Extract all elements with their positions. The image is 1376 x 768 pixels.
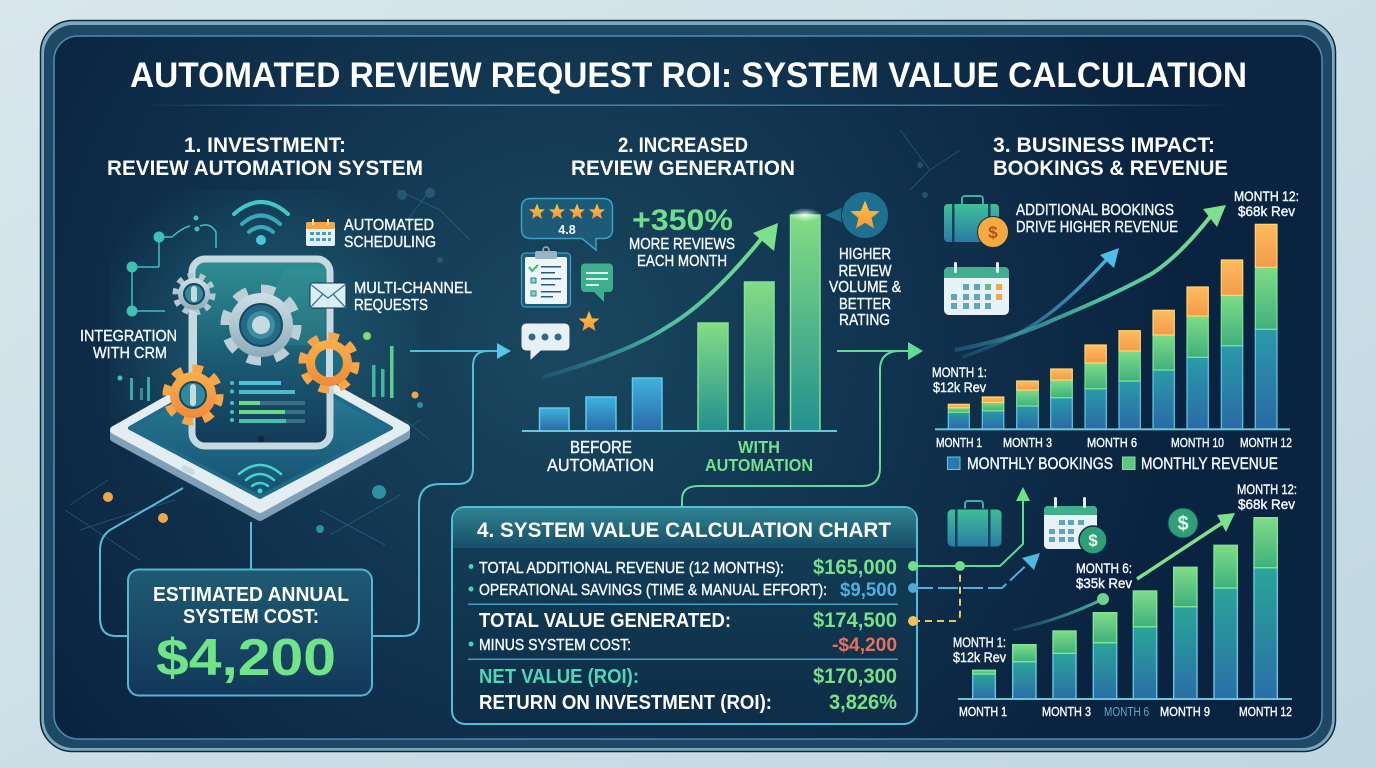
callout: estimated annual system cost xyxy=(128,570,372,696)
row: operational savings: OPERATIONAL SAVINGS (TIME & MANUAL EFFORT): xyxy=(479,582,827,599)
heading: step 1: REVIEW AUTOMATION SYSTEM xyxy=(107,157,423,180)
row: minus system cost: MINUS SYSTEM COST: xyxy=(479,637,631,654)
label: additional bookings: ADDITIONAL BOOKINGS xyxy=(1016,202,1174,219)
label: higher review volume: RATING xyxy=(839,312,890,329)
callout: estimated annual system cost: SYSTEM COST: xyxy=(183,606,319,628)
axis labels: months, bottom chart xyxy=(959,705,1292,719)
label: integration with CRM xyxy=(80,328,177,362)
small side bars xyxy=(130,332,394,401)
annotations: month 1 and month 12 revenue xyxy=(932,189,1299,395)
row: additional revenue: TOTAL ADDITIONAL REVENUE (12 MONTHS): xyxy=(479,560,784,577)
icon: calendar xyxy=(306,219,335,246)
heading: step 2: REVIEW GENERATION xyxy=(571,157,795,180)
row: additional revenue: $165,000 xyxy=(813,556,897,579)
axis labels: before / with automation: AUTOMATION xyxy=(705,455,813,475)
icon: suitcase and coin xyxy=(944,196,1008,248)
axis labels: months, bottom chart: MONTH 6 xyxy=(1104,705,1149,719)
icon: dollar coin xyxy=(1168,508,1198,538)
arrow head: to step 3 xyxy=(908,342,923,360)
row: total value generated: TOTAL VALUE GENERATED: xyxy=(479,610,731,632)
icon: suitcase and coin: $ xyxy=(988,223,998,242)
label: higher review volume: HIGHER xyxy=(839,246,891,263)
row: return on investment: RETURN ON INVESTMENT (ROI): xyxy=(479,692,772,714)
legend: MONTHLY REVENUE xyxy=(1141,455,1278,473)
axis labels: months, bottom chart: MONTH 1 xyxy=(959,705,1007,719)
axis labels: months, top chart: MONTH 3 xyxy=(1003,436,1052,450)
axis labels: before / with automation: AUTOMATION xyxy=(547,455,654,475)
chat bubble xyxy=(521,323,570,361)
rating bubble xyxy=(522,198,612,250)
heading: step 1 xyxy=(107,134,423,180)
icon: green suitcase xyxy=(947,501,1002,547)
tablet base xyxy=(114,347,406,517)
label: additional bookings: DRIVE HIGHER REVENUE xyxy=(1016,219,1178,236)
arrow: growth curve xyxy=(543,223,778,377)
label: higher review volume: BETTER xyxy=(839,296,891,313)
bar chart: monthly revenue growth xyxy=(958,518,1292,700)
icon: calendar with dollar coin xyxy=(1044,497,1107,554)
annotations: month 1 and month 12 revenue: MONTH 12: xyxy=(1234,189,1299,204)
icon: dollar coin: $ xyxy=(1177,513,1189,535)
row: minus system cost: -$4,200 xyxy=(832,634,897,656)
chart title: 4. SYSTEM VALUE CALCULATION CHART xyxy=(477,518,891,542)
rating bubble: 4.8 xyxy=(558,223,576,237)
callout: +350% more reviews: +350% xyxy=(632,204,733,237)
callout: estimated annual system cost: $4,200 xyxy=(156,629,336,687)
axis labels: before / with automation: BEFORE xyxy=(570,437,632,457)
row: net value: NET VALUE (ROI): xyxy=(479,666,639,688)
wifi icon on base xyxy=(239,465,281,494)
axis labels: months, top chart: MONTH 1 xyxy=(936,436,982,450)
network dots xyxy=(103,376,423,533)
heading: step 2 xyxy=(571,134,795,180)
annotations: revenue milestones: $35k Rev xyxy=(1076,576,1132,591)
callout: +350% more reviews: MORE REVIEWS xyxy=(629,236,735,253)
label: integration with CRM: INTEGRATION xyxy=(80,328,177,345)
clipboard xyxy=(522,247,570,307)
annotations: revenue milestones: $68k Rev xyxy=(1238,497,1295,512)
row: net value xyxy=(479,665,897,688)
legend xyxy=(948,455,1278,473)
wifi icon top xyxy=(234,202,288,245)
label: integration with CRM: WITH CRM xyxy=(93,345,167,362)
connectors: calculation rows to bottom chart xyxy=(908,487,1040,626)
heading: step 3 xyxy=(993,134,1228,180)
callout: +350% more reviews: EACH MONTH xyxy=(637,253,727,270)
axis labels: months, bottom chart: MONTH 3 xyxy=(1042,705,1091,719)
annotations: revenue milestones xyxy=(953,482,1297,665)
annotations: month 1 and month 12 revenue: MONTH 1: xyxy=(932,365,987,380)
small star xyxy=(579,311,599,331)
callout: estimated annual system cost: ESTIMATED ANNUAL xyxy=(153,584,349,606)
axis labels: months, top chart: MONTH 10 xyxy=(1171,436,1224,450)
axis labels: months, top chart xyxy=(936,436,1292,450)
arrow: step 1 to step 2 xyxy=(497,343,511,359)
axis labels: before / with automation xyxy=(547,437,813,475)
heading: step 2: 2. INCREASED xyxy=(618,134,748,157)
heading: step 3: BOOKINGS & REVENUE xyxy=(993,157,1228,180)
heading: step 1: 1. INVESTMENT: xyxy=(184,134,346,157)
row: additional revenue xyxy=(468,556,897,579)
label: automated scheduling xyxy=(344,217,436,251)
icon: envelope xyxy=(310,283,346,308)
annotations: revenue milestones: $12k Rev xyxy=(953,650,1006,665)
annotations: revenue milestones: MONTH 6: xyxy=(1076,561,1132,576)
axis labels: before / with automation: WITH xyxy=(738,437,780,457)
annotations: revenue milestones: MONTH 12: xyxy=(1237,482,1297,497)
row: operational savings xyxy=(468,579,897,601)
row: total value generated: $174,500 xyxy=(813,609,897,632)
connectors: tablet to cost box and onward xyxy=(100,351,500,636)
annotations: month 1 and month 12 revenue: $12k Rev xyxy=(933,380,986,395)
row: total value generated xyxy=(479,609,897,632)
bar chart: review generation xyxy=(522,208,837,432)
stacked bar chart: bookings and revenue xyxy=(935,224,1290,430)
icon group: review badges xyxy=(521,198,613,361)
label: multi-channel requests: REQUESTS xyxy=(354,297,428,314)
label: higher review volume xyxy=(829,246,901,329)
axis labels: months, top chart: MONTH 6 xyxy=(1087,436,1137,450)
arrow: green trend xyxy=(955,205,1226,350)
label: multi-channel requests: MULTI-CHANNEL xyxy=(354,280,472,297)
connector: step 2 and calculation to step 3 xyxy=(682,351,912,507)
orange gear left xyxy=(167,312,219,421)
row: return on investment: 3,826% xyxy=(829,691,897,714)
label: automated scheduling: SCHEDULING xyxy=(344,234,436,251)
screen list rows xyxy=(230,381,305,423)
background network decoration xyxy=(65,130,960,560)
small grey gear xyxy=(176,276,212,312)
icon: star badge xyxy=(825,192,888,238)
row: net value: $170,300 xyxy=(813,665,897,688)
panel header xyxy=(453,508,916,548)
legend: MONTHLY BOOKINGS xyxy=(967,455,1113,473)
label: automated scheduling: AUTOMATED xyxy=(344,217,434,234)
callout: +350% more reviews xyxy=(629,204,735,270)
axis labels: months, top chart: MONTH 12 xyxy=(1240,436,1292,450)
icon: calendar large xyxy=(944,262,1009,315)
axis labels: months, bottom chart: MONTH 9 xyxy=(1160,705,1210,719)
arrow: blue trend xyxy=(963,248,1119,357)
label: multi-channel requests xyxy=(354,280,472,314)
label: higher review volume: REVIEW xyxy=(838,263,892,280)
heading: step 3: 3. BUSINESS IMPACT: xyxy=(993,134,1215,157)
large grey gear xyxy=(226,290,296,360)
annotations: month 1 and month 12 revenue: $68k Rev xyxy=(1238,204,1295,219)
green comment bubble xyxy=(581,264,613,302)
upright tablet xyxy=(192,259,330,446)
arrow: revenue trend xyxy=(1013,513,1235,630)
axis labels: months, bottom chart: MONTH 12 xyxy=(1239,705,1292,719)
row: operational savings: $9,500 xyxy=(840,579,897,601)
title: AUTOMATED REVIEW REQUEST ROI: SYSTEM VALUE CALCULATION xyxy=(130,56,1247,95)
illustration: review automation tablet xyxy=(103,202,423,533)
label: additional bookings xyxy=(1016,202,1178,236)
panel: system value calculation chart xyxy=(452,507,917,724)
circuit nodes xyxy=(126,216,216,316)
icon: calendar with dollar coin: $ xyxy=(1088,531,1098,550)
annotations: revenue milestones: MONTH 1: xyxy=(953,635,1006,650)
row: minus system cost xyxy=(468,634,897,656)
label: higher review volume: VOLUME & xyxy=(829,279,901,296)
orange gear right xyxy=(303,337,355,389)
